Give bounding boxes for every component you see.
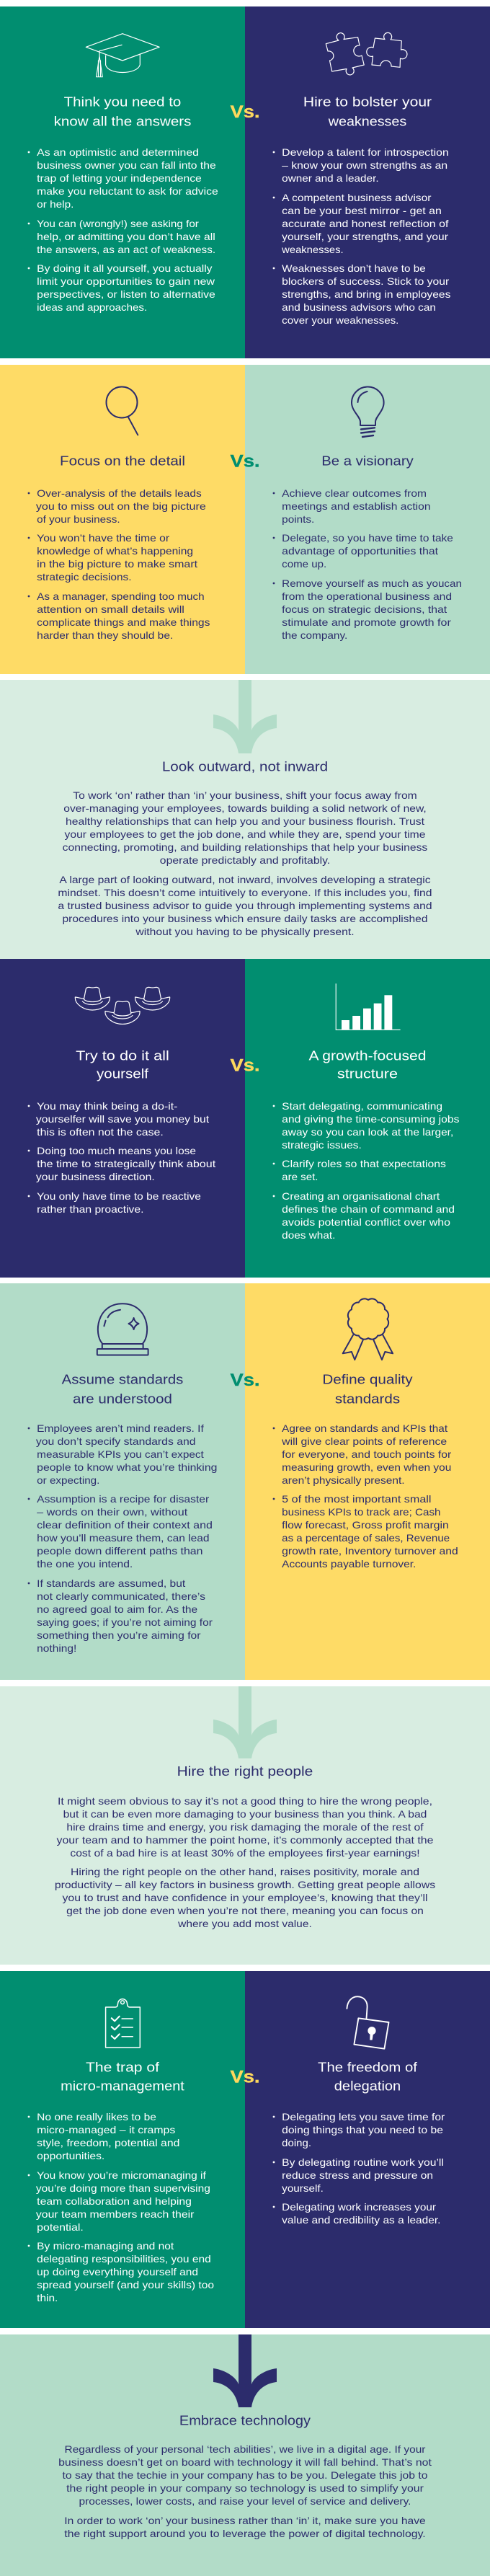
right bullet list bbox=[273, 146, 450, 326]
text block bbox=[58, 789, 432, 937]
left bullet list: You can (wrongly!) see asking for bbox=[37, 218, 199, 229]
icon: clipboard checklist bbox=[106, 1999, 140, 2048]
text block: get the job done even when you’re not there, meaning you can focus on bbox=[66, 1905, 424, 1916]
left bullet list: You only have time to be reactive bbox=[37, 1190, 201, 1202]
left bullet list: you’re doing more than supervising bbox=[36, 2182, 210, 2194]
heading: embrace technology: Embrace technology bbox=[179, 2412, 311, 2427]
right bullet list: growth rate, Inventory turnover and bbox=[282, 1545, 458, 1557]
panel: focus on the detail vs be a visionary bbox=[0, 365, 490, 674]
right bullet list: business KPIs to track are; Cash bbox=[282, 1506, 441, 1518]
text block: To work ‘on’ rather than ‘in’ your business, shift your focus away from bbox=[73, 789, 417, 801]
right bullet list: By delegating routine work you’ll bbox=[282, 2156, 444, 2168]
left bullet list: Assumption is a recipe for disaster bbox=[37, 1493, 210, 1505]
heading: assume standards are understood: Assume standards bbox=[62, 1371, 183, 1386]
right bullet list: blockers of success. Stick to your bbox=[282, 275, 450, 287]
right bullet list: come up. bbox=[282, 558, 326, 570]
left bullet list: By micro-managing and not bbox=[37, 2240, 174, 2252]
heading: try to do it all yourself: Try to do it all bbox=[76, 1048, 169, 1063]
left bullet list bbox=[28, 487, 210, 641]
right bullet list: value and credibility as a leader. bbox=[282, 2214, 441, 2226]
right bullet list: weaknesses. bbox=[281, 244, 344, 255]
text block: the right people in your company so technology is used to simplify your bbox=[66, 2482, 424, 2494]
text block: It might seem obvious to say it’s not a good thing to hire the wrong people, bbox=[58, 1795, 432, 1807]
right bullet list: away so you can look at the larger, bbox=[282, 1126, 453, 1138]
left bullet list: You won’t have the time or bbox=[37, 532, 169, 544]
left bullet list: potential. bbox=[37, 2221, 84, 2233]
right bullet list bbox=[273, 1422, 458, 1570]
text block: your employees to get the job done, and while they are, spend your time bbox=[65, 828, 426, 840]
right bullet list: owner and a leader. bbox=[282, 172, 379, 184]
right bullet list: Clarify roles so that expectations bbox=[282, 1158, 446, 1169]
left bullet list: As an optimistic and determined bbox=[37, 146, 199, 158]
heading: define quality standards bbox=[322, 1371, 413, 1406]
heading: think you need to know all the answers: Think you need to bbox=[64, 94, 181, 109]
text block: mindset. This doesn’t come intuitively to everyone. If this includes you, find bbox=[58, 887, 432, 898]
right bullet list: aren’t physically present. bbox=[282, 1474, 405, 1486]
right bullet list: Achieve clear outcomes from bbox=[282, 487, 427, 499]
text block: productivity – all key factors in business growth. Getting great people allows bbox=[55, 1879, 435, 1890]
left bullet list: – words on their own, without bbox=[37, 1506, 187, 1518]
right bullet list: A competent business advisor bbox=[282, 192, 432, 203]
text block: you to trust and have confidence in your employee’s, knowing that they’ll bbox=[62, 1892, 428, 1903]
right bullet list: Delegate, so you have time to take bbox=[282, 532, 453, 544]
right bullet list: strengths, and bring in employees bbox=[282, 288, 450, 300]
right bullet list: flow forecast, Gross profit margin bbox=[282, 1519, 449, 1531]
right bullet list: Agree on standards and KPIs that bbox=[282, 1422, 447, 1434]
text block: processes, lower costs, and raise your level of service and delivery. bbox=[79, 2495, 411, 2507]
panel: try to do it all yourself vs growth-focused structure bbox=[0, 959, 490, 1278]
right bullet list: reduce stress and pressure on bbox=[282, 2169, 433, 2181]
left bullet list: or expecting. bbox=[37, 1474, 99, 1486]
text block: Hiring the right people on the other hand, raises positivity, morale and bbox=[71, 1866, 419, 1877]
left bullet list: As a manager, spending too much bbox=[37, 590, 205, 602]
right bullet list: Delegating work increases your bbox=[282, 2201, 436, 2213]
panel: trap of micro-management vs freedom of delegation bbox=[0, 1971, 490, 2328]
vs label: Vs. bbox=[231, 102, 259, 122]
icon: graduation cap bbox=[86, 34, 159, 77]
right bullet list: from the operational business and bbox=[282, 590, 452, 602]
right bullet list: points. bbox=[282, 513, 314, 525]
panel: look outward, not inward bbox=[0, 680, 490, 959]
text block: Regardless of your personal ‘tech abilities’, we live in a digital age. If your bbox=[65, 2443, 426, 2455]
heading: think you need to know all the answers: know all the answers bbox=[54, 113, 191, 128]
left bullet list: Over-analysis of the details leads bbox=[37, 487, 202, 499]
heading: define quality standards: Define quality bbox=[322, 1371, 413, 1386]
text block: business doesn’t get on board with technology it will fall behind. That’s not bbox=[58, 2456, 432, 2468]
left bullet list: help, or admitting you don’t have all bbox=[37, 231, 215, 242]
right bullet list: does what. bbox=[282, 1229, 335, 1241]
icon: magnifying glass bbox=[107, 386, 138, 435]
left bullet list: nothing! bbox=[37, 1642, 76, 1654]
heading: try to do it all yourself bbox=[76, 1048, 169, 1081]
arrow: down bbox=[213, 2334, 277, 2407]
right bullet list: defines the chain of command and bbox=[282, 1203, 455, 1215]
text block: procedures into your business which ensure daily tasks are accomplished bbox=[62, 913, 428, 924]
left bullet list: If standards are assumed, but bbox=[37, 1577, 185, 1589]
left bullet list: Doing too much means you lose bbox=[37, 1145, 196, 1156]
right bullet list: for everyone, and touch points for bbox=[282, 1448, 452, 1460]
left bullet list: team collaboration and helping bbox=[37, 2195, 192, 2207]
left bullet list: style, freedom, potential and bbox=[37, 2137, 179, 2148]
left bullet list: harder than they should be. bbox=[37, 629, 173, 641]
text block: your team and to hammer the point home, it’s commonly accepted that the bbox=[56, 1834, 434, 1846]
right bullet list bbox=[273, 1100, 460, 1241]
arrow: down bbox=[213, 680, 277, 753]
heading: hire to bolster your weaknesses: Hire to bolster your bbox=[303, 94, 432, 109]
text block: hire drains time and energy, you risk damaging the morale of the rest of bbox=[66, 1821, 424, 1833]
right bullet list: yourself, your strengths, and your bbox=[282, 231, 448, 242]
icon: three hats bbox=[75, 987, 170, 1024]
left bullet list: rather than proactive. bbox=[37, 1203, 144, 1215]
heading: the freedom of delegation: The freedom of bbox=[318, 2059, 418, 2074]
heading: assume standards are understood bbox=[62, 1371, 183, 1406]
left bullet list: the answers, as an act of weakness. bbox=[37, 244, 215, 255]
heading: a growth-focused structure: structure bbox=[337, 1066, 398, 1081]
text block bbox=[58, 2443, 432, 2539]
left bullet list: measurable KPIs you can’t expect bbox=[37, 1448, 204, 1460]
right bullet list: Creating an organisational chart bbox=[282, 1190, 440, 1202]
left bullet list: You may think being a do-it- bbox=[37, 1100, 178, 1112]
left bullet list: not clearly communicated, there’s bbox=[37, 1590, 205, 1602]
right bullet list: Start delegating, communicating bbox=[282, 1100, 442, 1112]
right bullet list: stimulate and promote growth for bbox=[282, 616, 451, 628]
left bullet list: trap of letting your independence bbox=[37, 172, 202, 184]
right bullet list: Delegating lets you save time for bbox=[282, 2111, 445, 2123]
right bullet list: and giving the time-consuming jobs bbox=[282, 1113, 460, 1125]
heading: try to do it all yourself: yourself bbox=[97, 1066, 149, 1081]
left bullet list: Employees aren’t mind readers. If bbox=[37, 1422, 204, 1434]
left bullet list: your team members reach their bbox=[36, 2208, 195, 2220]
heading: a growth-focused structure: A growth-focused bbox=[308, 1048, 427, 1063]
heading: the freedom of delegation: delegation bbox=[334, 2078, 401, 2093]
left bullet list: micro-managed – it cramps bbox=[37, 2124, 175, 2135]
left bullet list: You know you’re micromanaging if bbox=[37, 2169, 206, 2181]
right bullet list: accurate and honest reflection of bbox=[282, 218, 449, 229]
text block: without you having to be physically present. bbox=[135, 926, 355, 937]
right bullet list: 5 of the most important small bbox=[282, 1493, 431, 1505]
panel: hire the right people bbox=[0, 1686, 490, 1965]
right bullet list: the company. bbox=[282, 629, 347, 641]
left bullet list: attention on small details will bbox=[37, 603, 184, 615]
left bullet list: this is often not the case. bbox=[37, 1126, 164, 1138]
heading: hire the right people: Hire the right people bbox=[177, 1763, 313, 1779]
text block: to say that the techie in your company has to be you. Delegate this job to bbox=[62, 2469, 428, 2481]
heading: think you need to know all the answers bbox=[54, 94, 191, 128]
left bullet list: business owner you can fall into the bbox=[37, 159, 216, 171]
right bullet list bbox=[273, 487, 462, 641]
heading: be a visionary: Be a visionary bbox=[321, 453, 414, 468]
left bullet list: people to know what you’re thinking bbox=[37, 1461, 217, 1473]
icon: rosette bbox=[343, 1298, 393, 1360]
heading: a growth-focused structure bbox=[308, 1048, 427, 1081]
heading: the trap of micro-management bbox=[61, 2059, 184, 2093]
left bullet list: or help. bbox=[37, 198, 74, 210]
left bullet list: in the big picture to make smart bbox=[37, 558, 197, 570]
left bullet list: delegating responsibilities, you end bbox=[37, 2253, 211, 2265]
vs label: Vs. bbox=[231, 1055, 259, 1075]
left bullet list: No one really likes to be bbox=[37, 2111, 156, 2123]
left bullet list: By doing it all yourself, you actually bbox=[37, 262, 213, 274]
text block: over-managing your employees, towards building a solid network of new, bbox=[63, 802, 427, 814]
heading: the freedom of delegation bbox=[318, 2059, 418, 2093]
right bullet list: measuring growth, even when you bbox=[282, 1461, 451, 1473]
heading: look outward, not inward: Look outward, not inward bbox=[162, 758, 328, 774]
left bullet list: thin. bbox=[37, 2292, 58, 2303]
right bullet list: meetings and establish action bbox=[282, 500, 431, 512]
left bullet list: something then you’re aiming for bbox=[37, 1629, 201, 1641]
heading: focus on the detail: Focus on the detail bbox=[60, 453, 185, 468]
left bullet list: no agreed goal to aim for. As the bbox=[37, 1603, 197, 1615]
panel: know all the answers vs hire to bolster weaknesses bbox=[0, 6, 490, 358]
left bullet list: you to miss out on the big picture bbox=[36, 500, 206, 512]
text block: but it can be even more damaging to your business than you think. A bad bbox=[63, 1808, 427, 1820]
text block: connecting, promoting, and building relationships that help your business bbox=[63, 841, 427, 853]
heading: hire to bolster your weaknesses: weaknesses bbox=[328, 113, 406, 128]
text block bbox=[55, 1795, 435, 1929]
right bullet list: Develop a talent for introspection bbox=[282, 146, 449, 158]
left bullet list: of your business. bbox=[37, 513, 120, 525]
arrow: down bbox=[213, 1686, 277, 1758]
left bullet list: make you reluctant to ask for advice bbox=[37, 185, 218, 197]
icon: light bulb bbox=[352, 387, 384, 437]
left bullet list: how you’ll measure them, can lead bbox=[37, 1532, 210, 1544]
left bullet list: clear definition of their context and bbox=[37, 1519, 213, 1531]
heading: define quality standards: standards bbox=[335, 1391, 400, 1406]
panel: assume standards vs define quality standards bbox=[0, 1283, 490, 1680]
text block: the right support around you to leverage the power of digital technology. bbox=[64, 2528, 426, 2539]
left bullet list bbox=[28, 2111, 214, 2303]
text block: A large part of looking outward, not inward, involves developing a strategic bbox=[59, 874, 431, 885]
right bullet list: strategic issues. bbox=[282, 1139, 362, 1151]
left bullet list: your business direction. bbox=[36, 1171, 155, 1182]
icon: bar chart bbox=[336, 983, 401, 1030]
text block: In order to work ‘on’ your business rather than ‘in’ it, make sure you have bbox=[64, 2515, 426, 2526]
left bullet list: complicate things and make things bbox=[37, 616, 210, 628]
right bullet list: Accounts payable turnover. bbox=[282, 1558, 416, 1570]
vs label: Vs. bbox=[231, 1371, 259, 1390]
right bullet list: are set. bbox=[282, 1171, 318, 1182]
heading: assume standards are understood: are understood bbox=[73, 1391, 172, 1406]
left bullet list: the time to strategically think about bbox=[37, 1158, 215, 1169]
panel: embrace technology bbox=[0, 2334, 490, 2576]
right bullet list: advantage of opportunities that bbox=[282, 545, 438, 557]
vs label: Vs. bbox=[231, 2068, 259, 2087]
right bullet list: yourself. bbox=[282, 2182, 324, 2194]
right bullet list: avoids potential conflict over who bbox=[282, 1216, 450, 1228]
left bullet list: you don’t specify standards and bbox=[36, 1435, 196, 1447]
right bullet list: and business advisors who can bbox=[282, 301, 436, 313]
right bullet list: – know your own strengths as an bbox=[282, 159, 447, 171]
text block: a trusted business advisor to guide you through implementing systems and bbox=[58, 900, 432, 911]
icon: open padlock bbox=[347, 1996, 389, 2049]
left bullet list: people down different paths than bbox=[37, 1545, 203, 1557]
left bullet list: perspectives, or listen to alternative bbox=[37, 288, 215, 300]
heading: the trap of micro-management: The trap of bbox=[86, 2059, 160, 2074]
right bullet list: doing. bbox=[282, 2137, 311, 2148]
left bullet list: saying goes; if you’re not aiming for bbox=[37, 1616, 213, 1628]
left bullet list: the one you intend. bbox=[37, 1558, 133, 1570]
left bullet list: up doing everything yourself and bbox=[37, 2266, 198, 2278]
right bullet list: Weaknesses don’t have to be bbox=[282, 262, 426, 274]
right bullet list: will give clear points of reference bbox=[281, 1435, 447, 1447]
heading: hire to bolster your weaknesses bbox=[303, 94, 432, 128]
right bullet list: can be your best mirror - get an bbox=[282, 205, 442, 216]
right bullet list: as a percentage of sales, Revenue bbox=[282, 1532, 450, 1544]
left bullet list: ideas and approaches. bbox=[37, 301, 147, 313]
left bullet list: strategic decisions. bbox=[37, 571, 132, 583]
text block: where you add most value. bbox=[177, 1918, 312, 1929]
vs label: Vs. bbox=[231, 452, 259, 472]
left bullet list bbox=[28, 146, 218, 313]
text block: healthy relationships that can help you and your business flourish. Trust bbox=[66, 815, 424, 827]
left bullet list: opportunities. bbox=[37, 2150, 104, 2161]
left bullet list: spread yourself (and your skills) too bbox=[37, 2279, 214, 2290]
heading: the trap of micro-management: micro-management bbox=[61, 2078, 184, 2093]
left bullet list bbox=[28, 1422, 217, 1654]
right bullet list: doing things that you need to be bbox=[282, 2124, 443, 2135]
left bullet list bbox=[28, 1100, 215, 1215]
right bullet list: Remove yourself as much as youcan bbox=[282, 577, 462, 589]
left bullet list: limit your opportunities to gain new bbox=[37, 275, 215, 287]
right bullet list: cover your weaknesses. bbox=[282, 314, 398, 326]
left bullet list: knowledge of what’s happening bbox=[37, 545, 193, 557]
right bullet list bbox=[273, 2111, 445, 2226]
right bullet list: focus on strategic decisions, that bbox=[282, 603, 447, 615]
text block: operate predictably and profitably. bbox=[160, 854, 330, 866]
text block: cost of a bad hire is at least 30% of the employees first-year earnings! bbox=[70, 1847, 420, 1859]
left bullet list: yourselfer will save you money but bbox=[36, 1113, 209, 1125]
icon: puzzle pieces bbox=[326, 32, 407, 75]
icon: crystal ball bbox=[97, 1304, 148, 1355]
